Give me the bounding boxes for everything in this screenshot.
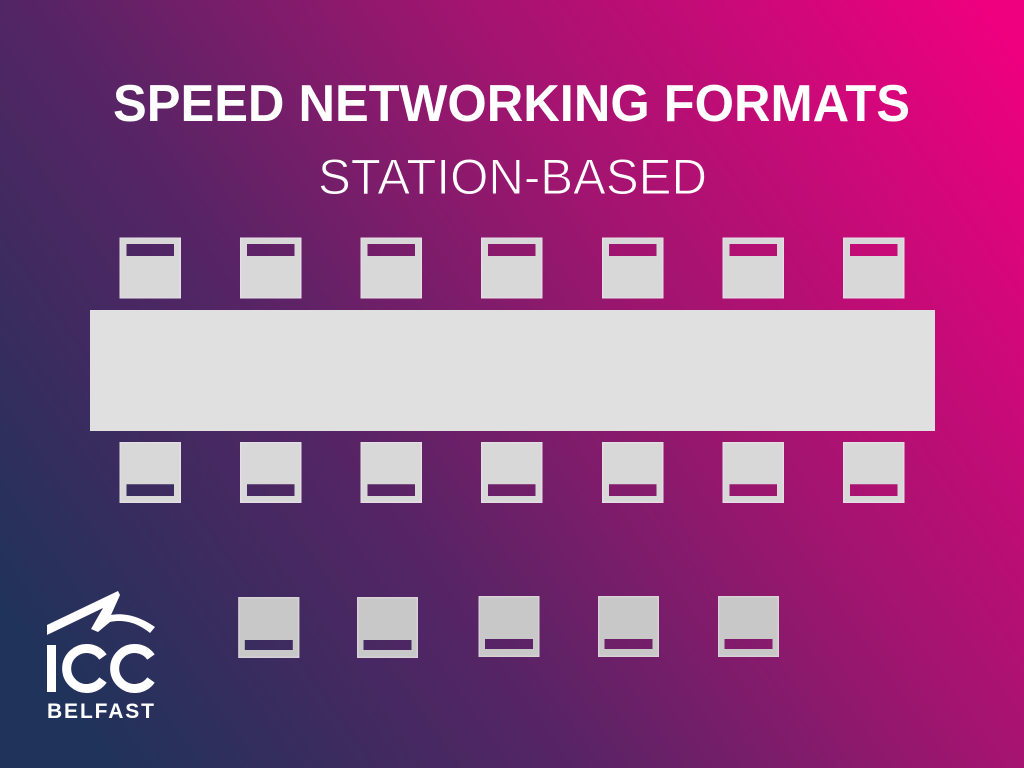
subtitle: STATION-BASED <box>318 149 707 205</box>
title: SPEED NETWORKING FORMATS <box>113 75 910 133</box>
bottom row of chairs <box>120 442 904 503</box>
ICC Belfast logo <box>47 591 155 723</box>
top row of chairs <box>120 238 904 298</box>
logo Belfast text: BELFAST <box>47 700 154 723</box>
logo roof <box>47 591 155 635</box>
logo ICC letters <box>52 645 151 692</box>
long table <box>90 310 935 431</box>
waiting row of chairs <box>238 596 779 658</box>
